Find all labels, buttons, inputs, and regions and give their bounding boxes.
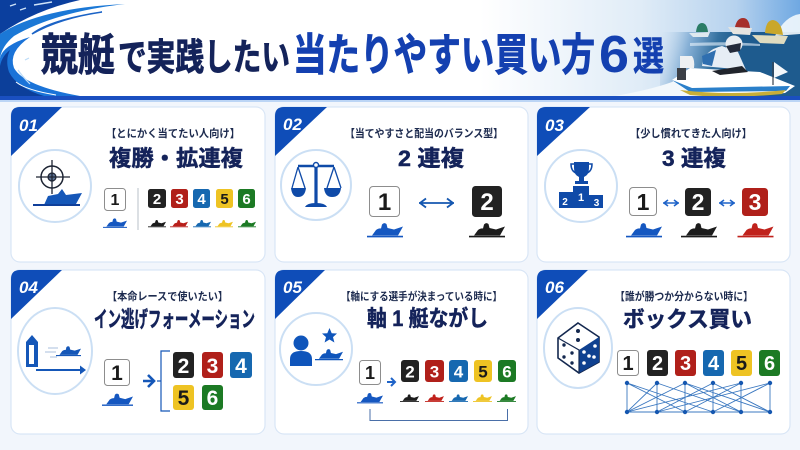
main boat bbox=[672, 36, 795, 97]
number badge 02: 02 bbox=[283, 115, 302, 134]
tile 1 and boat bbox=[367, 186, 403, 237]
panel: 05 軸1艇ながし bbox=[275, 270, 528, 434]
heading: 軸 1 艇ながし bbox=[367, 306, 488, 331]
arrow bbox=[143, 375, 154, 387]
number tiles: 4 bbox=[454, 362, 464, 382]
subtitle: 【当てやすさと配当のバランス型】 bbox=[345, 126, 503, 140]
number tiles: 2 bbox=[405, 362, 415, 382]
title bbox=[41, 26, 664, 84]
number tiles: 1 bbox=[365, 363, 375, 383]
tile group: 3 bbox=[207, 355, 218, 378]
number tiles: 6 bbox=[764, 353, 775, 375]
tile group: 2 bbox=[178, 355, 189, 378]
arrow bbox=[387, 378, 395, 386]
tile group: 6 bbox=[207, 387, 218, 410]
number tiles: 3 bbox=[680, 353, 691, 375]
number tiles: 5 bbox=[736, 353, 747, 375]
left water swirl bbox=[0, 0, 125, 96]
subtitle: 【とにかく当てたい人向け】 bbox=[106, 126, 240, 140]
icon: dice bbox=[544, 308, 612, 388]
title: で実践したい bbox=[118, 37, 290, 78]
panel: 01 複勝・拡連複 bbox=[11, 107, 265, 262]
arrow: double bbox=[663, 200, 679, 206]
tile 1 and boat bbox=[626, 188, 662, 237]
number tiles bbox=[104, 188, 255, 210]
icon: target and boat bbox=[19, 150, 91, 222]
number badge 05 bbox=[275, 270, 325, 319]
number badge 03 bbox=[537, 107, 590, 156]
number badge 04 bbox=[11, 270, 62, 319]
number tiles: 3 bbox=[175, 191, 184, 208]
number tiles bbox=[360, 360, 516, 384]
number tiles: 4 bbox=[197, 191, 206, 208]
icon: trophy on podium: 2 bbox=[562, 197, 568, 208]
number tiles bbox=[618, 350, 780, 376]
number tiles: 5 bbox=[220, 191, 229, 208]
tile 1 and boat: 1 bbox=[111, 362, 123, 385]
number badge 01 bbox=[11, 107, 62, 156]
tile 3 and boat bbox=[738, 188, 774, 237]
tile 2 and boat bbox=[681, 188, 717, 237]
title: 6 bbox=[599, 26, 629, 84]
number tiles: 1 bbox=[622, 353, 634, 375]
number badge 03: 03 bbox=[545, 116, 564, 135]
icon: tower and boat bbox=[18, 308, 92, 394]
icon: scales bbox=[281, 150, 351, 220]
tile group: 5 bbox=[178, 387, 190, 410]
network diagram bbox=[625, 381, 772, 414]
tile 2 and boat: 2 bbox=[692, 189, 704, 215]
subtitle: 【少し慣れてきた人向け】 bbox=[630, 126, 752, 140]
number tiles: 2 bbox=[153, 191, 161, 208]
tile 3 and boat: 3 bbox=[749, 189, 761, 215]
subtitle: 【本命レースで使いたい】 bbox=[107, 289, 228, 303]
boats bbox=[103, 218, 256, 227]
number badge 06 bbox=[537, 270, 588, 319]
number tiles: 3 bbox=[430, 362, 439, 382]
title: 当たりやすい買い方 bbox=[293, 31, 595, 80]
panel: 03 3連複 bbox=[537, 107, 790, 262]
icon: trophy on podium: 3 bbox=[594, 198, 600, 209]
subtitle: 【軸にする選手が決まっている時に】 bbox=[341, 289, 502, 303]
heading: イン逃げフォーメーション bbox=[94, 307, 255, 332]
number tiles: 4 bbox=[708, 353, 720, 375]
heading: 2 連複 bbox=[398, 146, 464, 171]
number tiles: 1 bbox=[111, 192, 120, 209]
heading: 複勝・拡連複 bbox=[109, 146, 243, 171]
number badge 05: 05 bbox=[283, 278, 302, 297]
tile 1 and boat: 1 bbox=[637, 189, 650, 215]
number badge 02 bbox=[275, 107, 327, 156]
tile 2 and boat: 2 bbox=[480, 189, 494, 216]
heading: ボックス買い bbox=[623, 307, 752, 332]
header bottom rule bbox=[0, 96, 800, 100]
panel: 04 イン逃げフォーメーション bbox=[11, 270, 265, 434]
title: 選 bbox=[633, 35, 664, 79]
distant boat green bbox=[689, 23, 710, 37]
icon: trophy on podium: 1 bbox=[578, 192, 584, 204]
number tiles: 6 bbox=[242, 191, 251, 208]
icon: trophy on podium bbox=[545, 150, 617, 222]
tile 1 and boat bbox=[102, 360, 133, 405]
bracket bbox=[370, 409, 508, 420]
arrow: double bbox=[419, 198, 454, 208]
distant boat red bbox=[728, 18, 752, 35]
title: 競艇 bbox=[41, 31, 115, 80]
number tiles: 5 bbox=[478, 362, 488, 382]
tile 1 and boat: 1 bbox=[378, 189, 391, 216]
heading: 3 連複 bbox=[662, 146, 726, 171]
header banner bbox=[0, 0, 800, 97]
arrow: double bbox=[719, 200, 735, 206]
panel: 06 ボックス買い bbox=[537, 270, 790, 434]
number badge 06: 06 bbox=[545, 278, 564, 297]
number badge 01: 01 bbox=[19, 116, 38, 135]
tile group bbox=[173, 352, 252, 410]
number tiles: 2 bbox=[652, 353, 663, 375]
number tiles: 6 bbox=[502, 362, 512, 382]
distant boat yellow bbox=[752, 20, 788, 44]
boats bbox=[357, 393, 516, 403]
racing photo scene bbox=[610, 14, 800, 97]
subtitle: 【誰が勝つか分からない時に】 bbox=[615, 289, 753, 303]
icon: person, star and boat bbox=[280, 313, 352, 385]
tile 2 and boat bbox=[469, 186, 505, 237]
bracket bbox=[157, 351, 170, 411]
number badge 04: 04 bbox=[19, 278, 38, 297]
panel: 02 2連複 bbox=[275, 107, 528, 262]
tile group: 4 bbox=[235, 355, 247, 378]
